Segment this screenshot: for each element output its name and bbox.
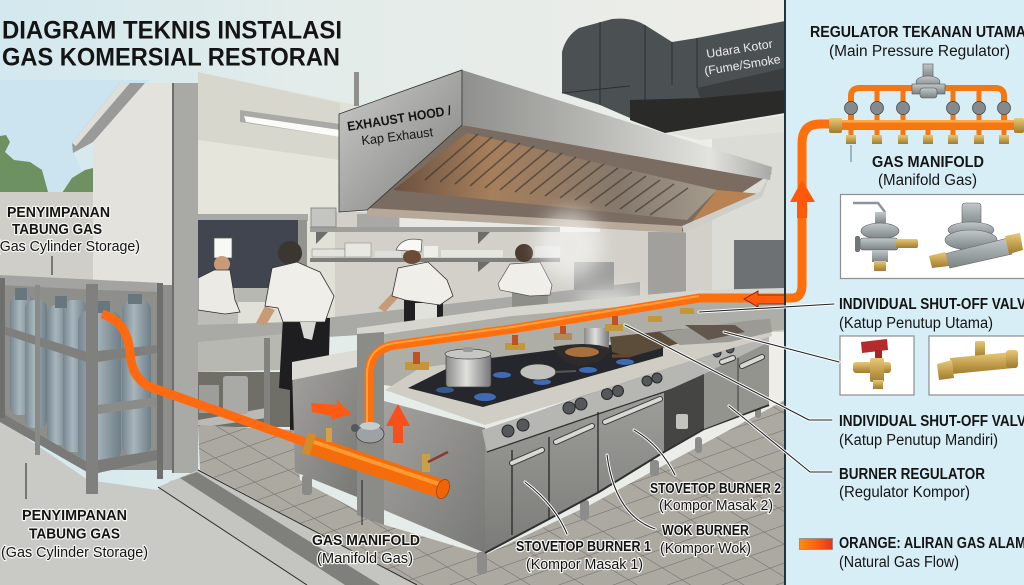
label: main shut-off valve: [839, 296, 1024, 332]
hood duct: [562, 19, 785, 140]
heading: main pressure regulator: (Main Pressure Regulator): [829, 43, 1010, 60]
orange gas manifold pipe with cap: [302, 428, 452, 500]
gas cylinder rack: [0, 275, 163, 494]
exhaust hood: [339, 70, 772, 233]
label: cylinder storage lower: PENYIMPANAN: [22, 507, 127, 524]
label: cylinder storage upper: [0, 204, 140, 255]
control knobs: [502, 345, 734, 437]
fridge and steam area: [574, 232, 785, 302]
back pot: [584, 328, 609, 352]
heading: main pressure regulator: [810, 24, 1024, 60]
interior floor tiles: [198, 400, 785, 585]
gas manifold schematic: [829, 64, 1024, 162]
steam: [538, 210, 642, 321]
label: burner regulator: [839, 466, 985, 501]
pressure regulator on manifold: [351, 422, 384, 443]
griddle and grill: [610, 305, 785, 357]
heading: gas manifold: [872, 154, 984, 189]
outside floor: [0, 420, 307, 585]
label: stovetop burner 1: (Kompor Masak 1): [526, 556, 643, 573]
chef 3 with cap: [378, 239, 453, 325]
label: individual shut-off valve: (Katup Penutup Mandiri): [839, 432, 998, 449]
label: main shut-off valve: (Katup Penutup Utama): [839, 315, 993, 332]
label: stovetop burner 1: [516, 538, 651, 573]
label: cylinder storage upper: TABUNG GAS: [12, 221, 102, 238]
short label tick lines: [26, 256, 362, 525]
outside wall: [0, 192, 93, 437]
pipe highlight: [367, 296, 699, 422]
wall behind cylinder rack: [0, 285, 172, 470]
label: gas manifold floor: (Manifold Gas): [317, 550, 413, 567]
sink unit cabinet: [292, 350, 357, 497]
title: GAS KOMERSIAL RESTORAN: [2, 44, 340, 72]
flow arrow left on pipe: [744, 291, 790, 307]
label: stovetop burner 2: STOVETOP BURNER 2: [650, 480, 781, 497]
hood label: EXHAUST HOOD /: [346, 103, 453, 134]
right info panel: [784, 0, 1024, 585]
dark window behind chef: [198, 214, 308, 328]
orange main riser pipe along backsplash: [369, 124, 832, 425]
sky behind building: [0, 80, 150, 195]
inset box: brass valve: [929, 336, 1024, 395]
orange gas supply pipe from cylinders: [102, 314, 305, 442]
range side and front: [384, 336, 769, 574]
legend: natural gas flow: (Natural Gas Flow): [839, 554, 959, 571]
interior back wall: [198, 72, 785, 332]
label: cylinder storage upper: PENYIMPANAN: [7, 204, 110, 221]
threshold strip: [158, 470, 417, 585]
branch valves on backsplash: [405, 308, 694, 370]
heading: gas manifold: GAS MANIFOLD: [872, 154, 984, 171]
hood label: [346, 103, 453, 148]
wok: [553, 344, 630, 366]
inset box: burner regulators: [840, 194, 1024, 278]
duct label text: (Fume/Smoke: [703, 52, 782, 78]
interior concrete column: [172, 83, 198, 473]
label: stovetop burner 2: [650, 480, 781, 514]
label: wok burner: WOK BURNER: [662, 522, 749, 539]
label: burner regulator: BURNER REGULATOR: [839, 466, 985, 483]
back work counter: [198, 282, 640, 433]
title: [2, 16, 342, 72]
label: gas manifold floor: GAS MANIFOLD: [312, 532, 420, 549]
legend: natural gas flow: [800, 535, 1024, 571]
up arrow in panel: [790, 180, 815, 218]
label: wok burner: (Kompor Wok): [660, 540, 751, 557]
ceiling light: [240, 110, 340, 137]
back splash wall: [357, 288, 785, 525]
rack frame: [0, 275, 163, 494]
hood label: Kap Exhaust: [361, 124, 434, 148]
tree outside: [0, 135, 93, 196]
red flow arrow right: [311, 399, 352, 420]
frying pan: [520, 364, 576, 380]
chef 4 back view: [498, 244, 552, 312]
manifold ball valves: [844, 102, 1010, 114]
open shelf with pots: [664, 342, 769, 451]
red flow arrow up: [386, 404, 410, 443]
back cylinders: [10, 288, 151, 462]
label: gas manifold floor: [312, 532, 420, 567]
icon: regulator with brass ends: [929, 203, 1023, 268]
background: sky and ceiling: [0, 0, 786, 585]
title: DIAGRAM TEKNIS INSTALASI: [2, 16, 342, 44]
label: individual shut-off valve: [839, 413, 1024, 449]
riser continuation in panel: [786, 124, 832, 298]
heading: gas manifold: (Manifold Gas): [878, 172, 977, 189]
label: burner regulator: (Regulator Kompor): [839, 484, 970, 501]
label: cylinder storage lower: [1, 507, 148, 561]
duct label text: Udara Kotor: [705, 37, 774, 61]
duct label text: [703, 37, 782, 78]
label: cylinder storage lower: TABUNG GAS: [29, 526, 120, 542]
oven door handles: [512, 357, 762, 463]
stock pot: [445, 347, 491, 387]
label: cylinder storage lower: (Gas Cylinder Storage): [1, 544, 148, 561]
manifold brass couplings: [829, 118, 1024, 144]
icon: red handle valve: [853, 339, 891, 389]
chef 2 back view with apron: [256, 241, 334, 432]
leader lines: [525, 304, 839, 534]
chef 1 with toque: [198, 238, 240, 314]
exhaust pole: [354, 72, 359, 106]
label: stovetop burner 1: STOVETOP BURNER 1: [516, 538, 651, 555]
icon: brass valve: [937, 341, 1018, 380]
main regulator body: [912, 64, 945, 98]
label: wok burner: [660, 522, 751, 557]
icon: regulator with lever: [853, 203, 918, 271]
building wall and roof: [72, 83, 172, 285]
wall shelves with plates: [310, 208, 560, 272]
cooktop surface: [385, 320, 772, 425]
label: stovetop burner 2: (Kompor Masak 2): [659, 497, 773, 514]
inset box: red handle valve: [840, 336, 914, 395]
